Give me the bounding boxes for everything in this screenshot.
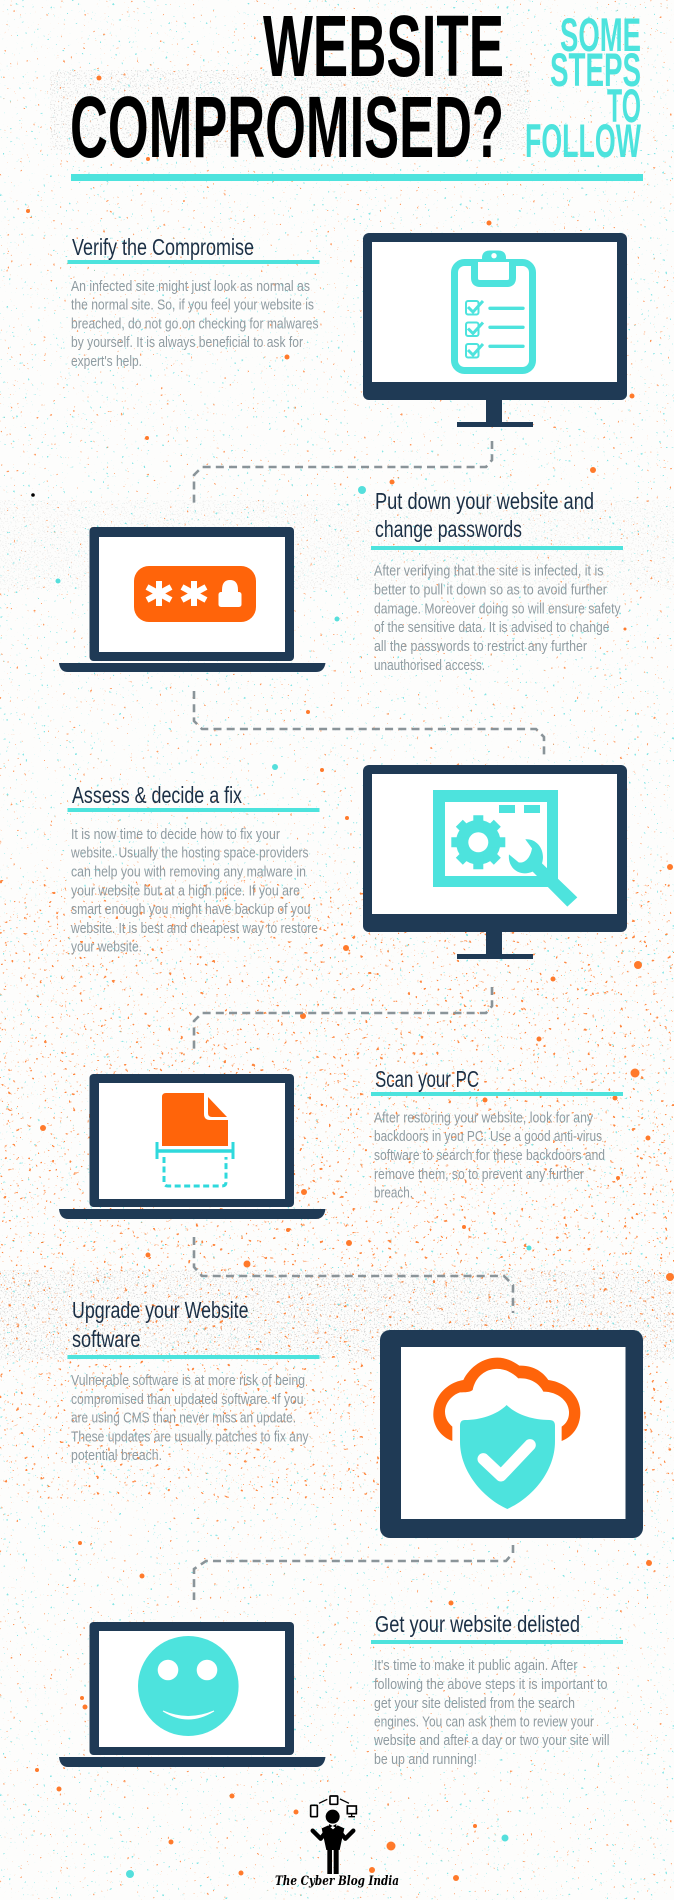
body text: are using CMS than never miss an update. bbox=[71, 1410, 296, 1426]
heading: verify the compromise: Verify the Compromise bbox=[72, 234, 254, 260]
body text: compromised than updated software. If you bbox=[71, 1391, 304, 1408]
arrow: dashed connector 4 bbox=[194, 1237, 513, 1313]
body text: better to pull it down so as to avoid further bbox=[374, 582, 607, 598]
body text bbox=[71, 278, 318, 370]
body text: software to search for these backdoors and bbox=[374, 1147, 605, 1164]
subtitle bbox=[525, 9, 641, 168]
body text: by yourself. It is always beneficial to ask for bbox=[71, 334, 303, 351]
body text: After restoring your website, look for any bbox=[374, 1110, 593, 1126]
body text: expert's help. bbox=[71, 353, 142, 370]
body text bbox=[374, 562, 621, 674]
underline bbox=[68, 1355, 320, 1359]
body text: be up and running! bbox=[374, 1751, 477, 1768]
icon: person with devices bbox=[311, 1796, 356, 1874]
body text bbox=[71, 1372, 309, 1464]
body text: website. It is best and cheapest way to restore bbox=[70, 920, 318, 937]
heading: put down your website bbox=[375, 488, 594, 542]
panel: step 4 text bbox=[371, 1066, 623, 1202]
icon: desktop monitor with checklist bbox=[363, 233, 627, 427]
body text: your website. bbox=[71, 938, 142, 956]
body text: engines. You can ask them to review your bbox=[374, 1714, 594, 1730]
underline bbox=[371, 1640, 623, 1644]
icon: desktop monitor with settings bbox=[363, 765, 627, 959]
icon: window, gear and wrench bbox=[433, 790, 577, 907]
body text: backdoors in you PC. Use a good anti-virus bbox=[374, 1128, 602, 1145]
heading: upgrade your website software: Upgrade your Website bbox=[72, 1297, 248, 1323]
heading: scan your pc: Scan your PC bbox=[375, 1066, 479, 1092]
underline bbox=[371, 1092, 623, 1096]
icon: large monitor with cloud shield bbox=[380, 1330, 643, 1538]
panel: step 2 text bbox=[371, 488, 623, 674]
icon: clipboard bbox=[454, 250, 532, 370]
body text bbox=[373, 1657, 610, 1768]
icon: laptop with file scan bbox=[59, 1074, 326, 1219]
panel: step 1 text bbox=[68, 234, 320, 370]
body text: website. Usually the hosting space providers bbox=[70, 844, 308, 862]
icon: shield with check bbox=[460, 1405, 555, 1509]
body text: the normal site. So, if you feel your website is bbox=[71, 296, 314, 314]
body text: smart enough you might have backup of you bbox=[71, 901, 310, 918]
underline bbox=[371, 546, 623, 550]
body text: It's time to make it public again. After bbox=[374, 1657, 578, 1674]
body text: all the passwords to restrict any further bbox=[374, 638, 587, 655]
body text: It is now time to decide how to fix your bbox=[71, 826, 280, 843]
logo: the cyber blog india bbox=[275, 1796, 399, 1889]
arrow: dashed connector 1 bbox=[194, 441, 492, 505]
icon: smiley face bbox=[138, 1636, 239, 1736]
title: WEBSITE bbox=[263, 0, 504, 95]
body text bbox=[374, 1110, 605, 1202]
body text: can help you with removing any malware in bbox=[71, 864, 306, 880]
body text: unauthorised access. bbox=[374, 657, 485, 674]
underline bbox=[68, 808, 320, 812]
arrow: dashed connector 5 bbox=[194, 1545, 513, 1600]
icon: cloud bbox=[433, 1358, 580, 1441]
arrow: dashed connector 2 bbox=[194, 691, 544, 755]
arrow: dashed connector 3 bbox=[194, 987, 492, 1052]
title bbox=[70, 0, 504, 176]
title rule bbox=[71, 174, 643, 181]
panel: step 3 text bbox=[68, 782, 320, 956]
icon: laptop with password bbox=[59, 527, 326, 672]
body text: get your site delisted from the search bbox=[374, 1695, 575, 1712]
underline bbox=[68, 260, 320, 264]
body text: An infected site might just look as normal as bbox=[71, 278, 310, 295]
body text: These updates are usually patches to fix any bbox=[71, 1428, 309, 1446]
heading: put down your website: change passwords bbox=[375, 516, 522, 542]
body text bbox=[70, 826, 318, 956]
panel: step 6 text bbox=[371, 1611, 623, 1768]
heading: put down your website: Put down your website and bbox=[375, 488, 594, 514]
heading: get your website delisted: Get your website delisted bbox=[375, 1611, 580, 1637]
body text: potential breach. bbox=[71, 1447, 162, 1464]
subtitle: TO bbox=[607, 80, 641, 133]
panel: step 5 text bbox=[68, 1297, 320, 1464]
brand name: The Cyber Blog India bbox=[275, 1874, 399, 1889]
body text: your website but at a high price. If you are bbox=[71, 882, 300, 900]
body text: following the above steps it is important to bbox=[374, 1676, 608, 1693]
heading: upgrade your website software: software bbox=[72, 1326, 140, 1352]
heading: upgrade your website software bbox=[72, 1297, 248, 1352]
body text: breached, do not go on checking for malwares bbox=[71, 316, 318, 332]
heading: assess and decide: Assess & decide a fix bbox=[72, 782, 242, 808]
icon: document being scanned bbox=[156, 1093, 234, 1186]
body text: of the sensitive data. It is advised to change bbox=[374, 619, 610, 636]
icon: password pill bbox=[134, 566, 256, 622]
body text: Vulnerable software is at more risk of being bbox=[71, 1372, 305, 1389]
body text: damage. Moreover doing so will ensure safety bbox=[374, 600, 621, 618]
body text: After verifying that the site is infected, it is bbox=[374, 562, 604, 580]
body text: breach. bbox=[374, 1184, 413, 1202]
body text: remove them, so to prevent any further bbox=[374, 1166, 584, 1183]
body text: website and after a day or two your site will bbox=[373, 1732, 610, 1749]
icon: laptop with smiley bbox=[59, 1622, 326, 1767]
